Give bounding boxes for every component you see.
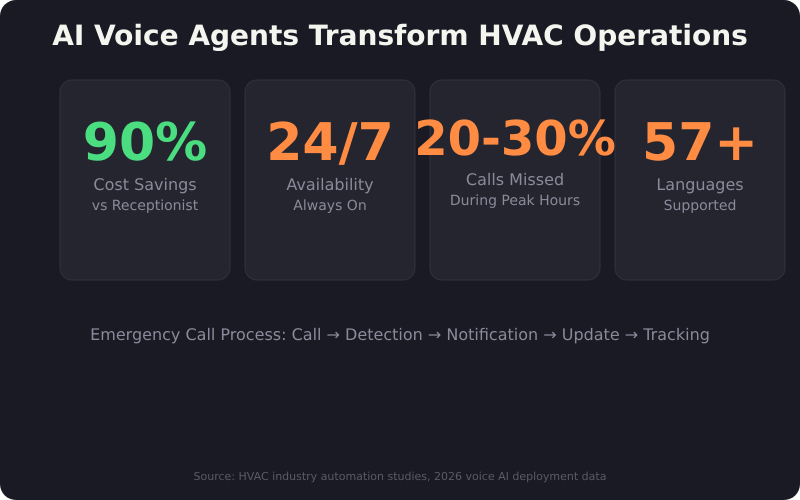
stat: 90%: 90% <box>83 113 207 173</box>
stat: 24/7: 24/7 <box>266 113 394 173</box>
label: calls missed: Calls Missed <box>466 170 564 189</box>
title: AI Voice Agents Transform HVAC Operations <box>52 19 748 52</box>
panel: availability <box>245 80 415 280</box>
sublabel: during peak hours: During Peak Hours <box>450 193 580 209</box>
stat: 57+: 57+ <box>642 113 758 173</box>
sublabel: vs receptionist: vs Receptionist <box>92 198 199 214</box>
label: cost savings: Cost Savings <box>93 175 197 194</box>
stat: 20-30%: 20-30% <box>414 111 616 167</box>
label: languages: Languages <box>656 175 744 194</box>
sublabel: supported: Supported <box>664 198 736 214</box>
panel: languages <box>615 80 785 280</box>
source footnote: Source: HVAC industry automation studies, 2026 voice AI deployment data <box>194 470 606 483</box>
process text: Emergency Call Process: Call → Detection → Notification → Update → Tracking <box>90 325 710 344</box>
panel: calls missed <box>414 80 616 280</box>
panel: cost savings <box>60 80 230 280</box>
sublabel: always on: Always On <box>293 198 367 214</box>
label: availability: Availability <box>286 175 374 194</box>
